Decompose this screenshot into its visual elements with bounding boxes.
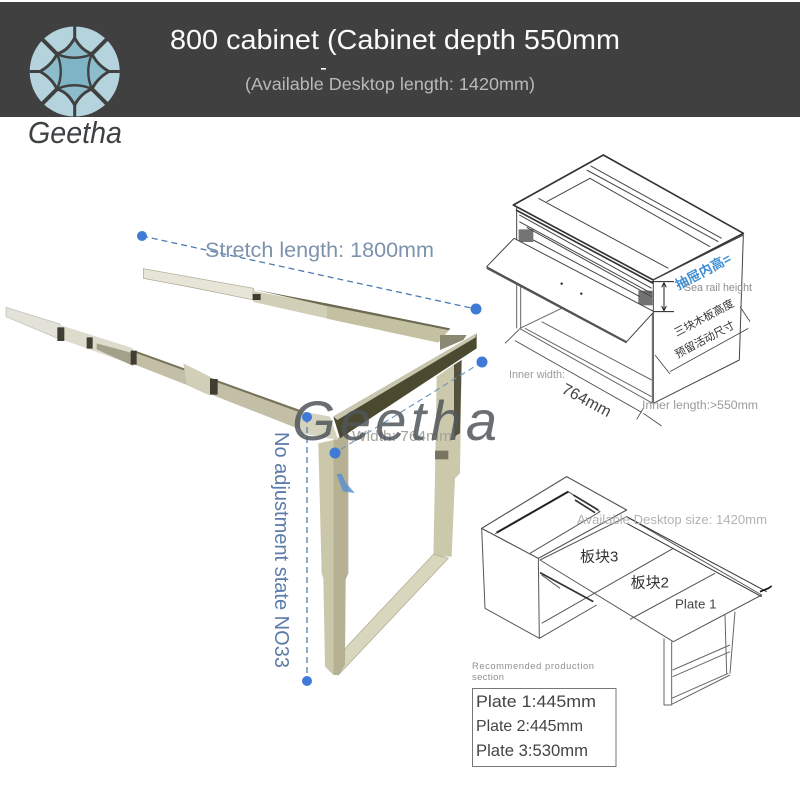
recommended production heading <box>472 660 594 682</box>
far leg <box>433 360 462 557</box>
depth arrow <box>655 307 750 374</box>
label: sea rail height: Sea rail height <box>684 282 752 294</box>
desktop labels <box>580 548 716 612</box>
endpoint dot <box>476 356 488 368</box>
front sliding rail <box>6 307 300 429</box>
plate 2 size: Plate 2:445mm <box>476 718 583 735</box>
dimension: width <box>330 356 488 491</box>
label: inner width: Inner width: <box>509 369 565 381</box>
endpoint dot <box>470 304 482 314</box>
width arrow <box>505 329 662 426</box>
leg assembly <box>664 612 735 705</box>
cabinet body <box>482 477 627 638</box>
drawer cavity <box>517 207 653 305</box>
subtitle: (Available Desktop length: 1420mm) <box>245 74 535 94</box>
cabinet side <box>653 235 743 403</box>
stretch length label: Stretch length: 1800mm <box>205 239 434 262</box>
lower cabinet shelf <box>517 283 653 403</box>
recommended production heading: section <box>472 671 504 682</box>
endpoint dot <box>330 448 340 458</box>
height arrow <box>652 282 674 312</box>
logo wordmark: Geetha <box>28 115 122 150</box>
drawer flap <box>487 238 654 343</box>
reserve size label: 预留活动尺寸 <box>672 318 737 361</box>
extended desktop <box>540 517 772 642</box>
near leg <box>318 433 348 675</box>
plate 2 label: 板块2 <box>631 574 669 592</box>
height label: No adjustment state NO33 <box>270 432 292 668</box>
plate 1 label: Plate 1 <box>675 597 716 612</box>
header banner <box>0 2 800 117</box>
dimension: stretch length <box>137 231 482 314</box>
small header dash <box>321 68 326 70</box>
blue inner height label: 抽屉内高= <box>672 250 734 293</box>
corner and side rail <box>298 333 477 459</box>
diagram: cabinet with drawer <box>487 155 750 426</box>
side labels <box>559 250 737 421</box>
plate size table <box>472 688 616 766</box>
board height label: 三块木板高度 <box>672 296 736 339</box>
plate 1 size: Plate 1:445mm <box>476 692 596 711</box>
blue mark on leg <box>338 474 351 491</box>
plate 3 size: Plate 3:530mm <box>476 742 588 760</box>
lower crossbar <box>333 554 448 675</box>
product photo: extendable desk frame <box>6 269 477 675</box>
title: 800 cabinet (Cabinet depth 550mm <box>170 24 620 55</box>
icon: Geetha logo <box>28 26 122 150</box>
endpoint dot <box>302 676 312 686</box>
label: available desktop size: Available Desktop size: 1420mm <box>577 513 767 527</box>
label: inner length: Inner length:>550mm <box>642 398 758 412</box>
diagram: cabinet with extended desktop <box>482 477 772 705</box>
cabinet top <box>513 155 743 283</box>
plate 3 label: 板块3 <box>580 548 618 566</box>
endpoint dot <box>302 412 312 422</box>
endpoint dot <box>137 231 147 241</box>
recommended production heading: Recommended production <box>472 660 594 671</box>
764mm label: 764mm <box>559 381 614 421</box>
watermark: Geetha <box>292 389 497 452</box>
dimension: height <box>270 412 312 686</box>
width label: Width: 764mm <box>352 429 452 445</box>
rear sliding rail <box>143 269 450 343</box>
